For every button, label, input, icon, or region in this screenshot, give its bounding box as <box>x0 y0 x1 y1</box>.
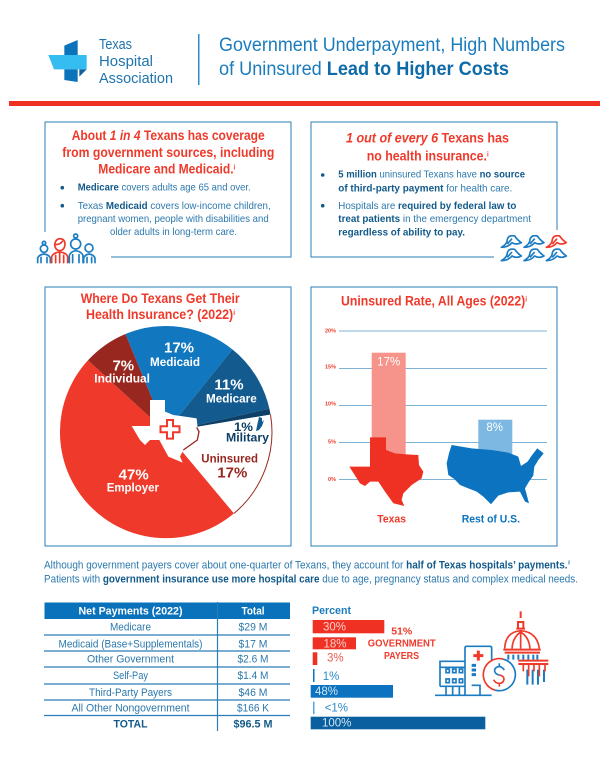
bar: Texas 17% <box>372 353 406 457</box>
label: Individual 7%: 7% <box>112 358 134 375</box>
bullet list: uninsured facts: treat patients in the emergency department <box>338 213 531 225</box>
label: Texas: Texas <box>377 513 406 525</box>
label: Medicare 11% <box>206 376 257 405</box>
axis labels: 20% <box>325 328 336 334</box>
label: Employer 47%: Employer <box>107 481 159 495</box>
title: of Uninsured Lead to Higher Costs <box>219 58 509 80</box>
label: Medicaid 17%: 17% <box>164 340 194 357</box>
dollar circle <box>483 659 515 691</box>
logo wordmark <box>99 36 173 87</box>
bar values: 3% <box>327 653 344 665</box>
table rows: Third-Party Payers <box>89 687 172 699</box>
label: Uninsured 17%: Uninsured <box>201 452 258 466</box>
axis labels <box>325 328 336 483</box>
label: Military 1% <box>226 417 269 445</box>
table rows: $17 M <box>238 638 268 650</box>
table rows: Medicaid (Base+Supplementals) <box>58 638 202 650</box>
label: Medicaid 17% <box>150 340 200 369</box>
bullet list: Medicare and Medicaid: Texas Medicaid covers low-income children, <box>78 200 271 212</box>
table rows: $96.5 M <box>234 719 272 731</box>
panel: uninsured rate <box>311 287 557 546</box>
table rows: TOTAL <box>114 719 148 731</box>
icon: Texas Hospital Association logo <box>48 40 87 82</box>
header <box>9 34 600 106</box>
bar values: 18% <box>324 638 347 650</box>
heading: 1 out of every 6 <box>346 130 509 164</box>
table header <box>78 606 264 618</box>
bar chart heading: i <box>525 297 527 304</box>
logo wordmark: Texas <box>99 36 132 53</box>
table rows: $166 K <box>237 703 270 715</box>
bar values: 1% <box>323 671 339 683</box>
label: Medicare 11%: 11% <box>214 376 244 393</box>
title <box>219 34 565 80</box>
heading: 1 out of every 6: i <box>487 152 489 159</box>
pie chart heading <box>81 291 240 322</box>
capitol <box>503 611 548 685</box>
table header: Net Payments (2022) <box>78 606 183 618</box>
panel: government coverage <box>38 122 291 263</box>
icon: hospital, dollar sign and capitol <box>435 611 548 695</box>
table rows: $2.6 M <box>238 654 268 666</box>
bullet list: Medicare and Medicaid: pregnant women, people with disabilities and <box>78 213 269 225</box>
callout: 51% government payers: PAYERS <box>384 650 419 662</box>
label: Uninsured 17%: 17% <box>217 464 247 481</box>
table rows: Other Government <box>87 654 174 666</box>
logo wordmark: Hospital <box>99 53 153 70</box>
text block: government payers summary <box>44 560 578 586</box>
heading: 1 out of every 6: 1 out of every 6 Texans has <box>346 130 509 146</box>
text block: government payers summary: ii <box>568 560 570 566</box>
bullet list: uninsured facts <box>321 169 531 239</box>
pie chart heading: Where Do Texans Get Their <box>81 291 240 306</box>
bar chart <box>325 328 547 525</box>
text block: government payers summary: Patients with government insurance use more hospital care due to age, pregnancy status and complex medical needs. <box>44 574 578 586</box>
table: net payments <box>44 602 290 731</box>
table header: Total <box>242 606 264 618</box>
pie chart <box>60 326 272 538</box>
table rows: $46 M <box>238 687 268 699</box>
bullet list: Medicare and Medicaid: Medicare covers adults age 65 and over. <box>78 182 251 194</box>
table rows: All Other Nongovernment <box>72 703 190 715</box>
icon: Texas outline with red cross <box>132 400 199 463</box>
label: Employer 47%: 47% <box>119 466 149 483</box>
bullet list: uninsured facts: of third-party payment for health care. <box>338 183 512 195</box>
table rows: Medicare <box>110 622 151 634</box>
logo wordmark: Association <box>99 70 173 87</box>
label: Military 1%: Military <box>226 431 269 445</box>
pie chart heading: i <box>233 310 235 317</box>
heading: 1 in 4 Texans: Medicare and Medicaid. <box>98 161 250 176</box>
text block: government payers summary: Although government payers cover about one-quarter of Texans, they account for half of Texas hospitals’ payments. <box>44 560 584 572</box>
heading: 1 in 4 Texans: i <box>234 164 235 171</box>
title: Government Underpayment, High Numbers <box>219 34 565 56</box>
bar values <box>315 622 351 729</box>
bullet list: Medicare and Medicaid: older adults in long-term care. <box>110 226 237 238</box>
bar: Rest of U.S. 8%: 8% <box>486 422 503 434</box>
icon: Texas map <box>349 437 423 506</box>
heading: 1 out of every 6: no health insurance. <box>367 148 503 164</box>
label: Individual 7% <box>94 358 150 386</box>
table rows: Self-Pay <box>113 670 148 682</box>
icon: U.S. map <box>447 445 544 504</box>
axis labels: 0% <box>328 477 336 483</box>
label: Employer 47% <box>107 466 159 495</box>
bar: Rest of U.S. 8% <box>478 420 512 460</box>
bars <box>311 620 485 729</box>
heading: 1 in 4 Texans <box>62 128 274 176</box>
hospital <box>435 646 492 695</box>
bar values: 48% <box>315 686 338 698</box>
chart heading: Percent <box>312 605 351 617</box>
bar chart heading: Uninsured Rate, All Ages (2022) <box>341 294 544 309</box>
bullet list: uninsured facts: 5 million uninsured Texans have no source <box>338 169 525 181</box>
table rows <box>58 622 272 731</box>
label: Rest of U.S.: Rest of U.S. <box>462 513 520 525</box>
bar values: 100% <box>322 717 351 729</box>
heading: 1 in 4 Texans: About 1 in 4 Texans has coverage <box>72 128 265 143</box>
panel: uninsured Texans <box>311 122 566 261</box>
table rows: $29 M <box>238 622 268 634</box>
bar: Texas 17%: 17% <box>377 357 400 369</box>
table rows: $1.4 M <box>238 670 268 682</box>
callout: 51% government payers: GOVERNMENT <box>368 638 436 650</box>
axis labels: 15% <box>325 364 336 370</box>
axis labels: 10% <box>325 402 336 408</box>
axis labels: 5% <box>328 440 336 446</box>
panel: where Texans get insurance <box>45 287 291 546</box>
pie chart heading: Health Insurance? (2022) <box>86 307 246 322</box>
bullet list: Medicare and Medicaid <box>60 182 271 238</box>
bullet list: uninsured facts: Hospitals are required by federal law to <box>338 200 516 212</box>
bullet list: uninsured facts: regardless of ability to pay. <box>338 227 465 239</box>
callout: 51% government payers <box>368 625 436 662</box>
callout: 51% government payers: 51% <box>391 625 413 637</box>
icon: six cowboy hats <box>501 236 566 261</box>
bar values: 30% <box>323 622 346 634</box>
heading: 1 in 4 Texans: from government sources, including <box>62 145 274 160</box>
label: Medicare 11%: Medicare <box>206 391 257 405</box>
label: Individual 7%: Individual <box>94 372 150 386</box>
label: Medicaid 17%: Medicaid <box>150 355 200 369</box>
icon: group of people <box>38 234 95 263</box>
label: Military 1%: 1% <box>234 420 253 434</box>
label: Uninsured 17% <box>201 452 258 481</box>
bar values: <1% <box>325 703 348 715</box>
percent bar chart <box>311 605 548 729</box>
